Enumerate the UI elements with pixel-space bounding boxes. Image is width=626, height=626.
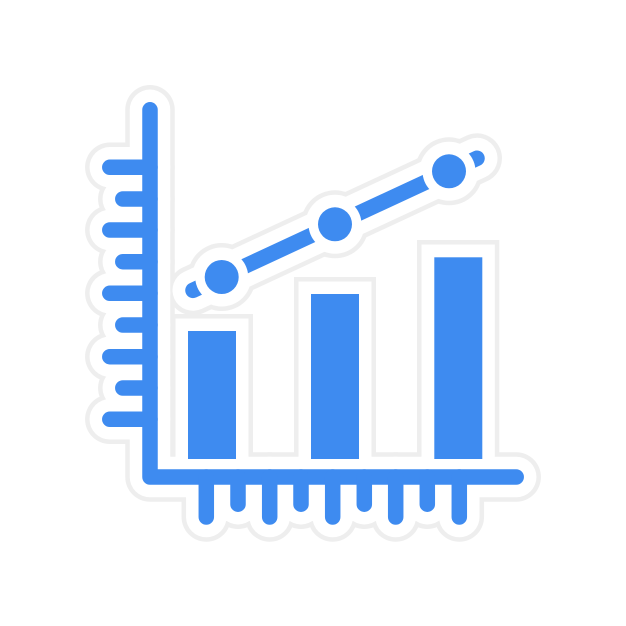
bar 3 xyxy=(434,257,482,459)
gaps around data points xyxy=(195,145,475,304)
bar 1 xyxy=(188,331,236,459)
vertical axis tick marks xyxy=(110,167,150,419)
chart axes xyxy=(150,110,516,477)
data point 3 xyxy=(432,154,466,188)
sticker outline: grey border xyxy=(110,110,516,517)
data point 2 xyxy=(318,207,352,241)
horizontal axis tick marks xyxy=(206,477,459,517)
data point 1 xyxy=(205,260,239,294)
sticker backing: white inner border xyxy=(110,110,516,517)
trend line xyxy=(193,158,477,290)
bar chart: three rising bars xyxy=(188,257,482,459)
bar 2 xyxy=(311,294,359,459)
trend line with three data points xyxy=(193,145,477,304)
